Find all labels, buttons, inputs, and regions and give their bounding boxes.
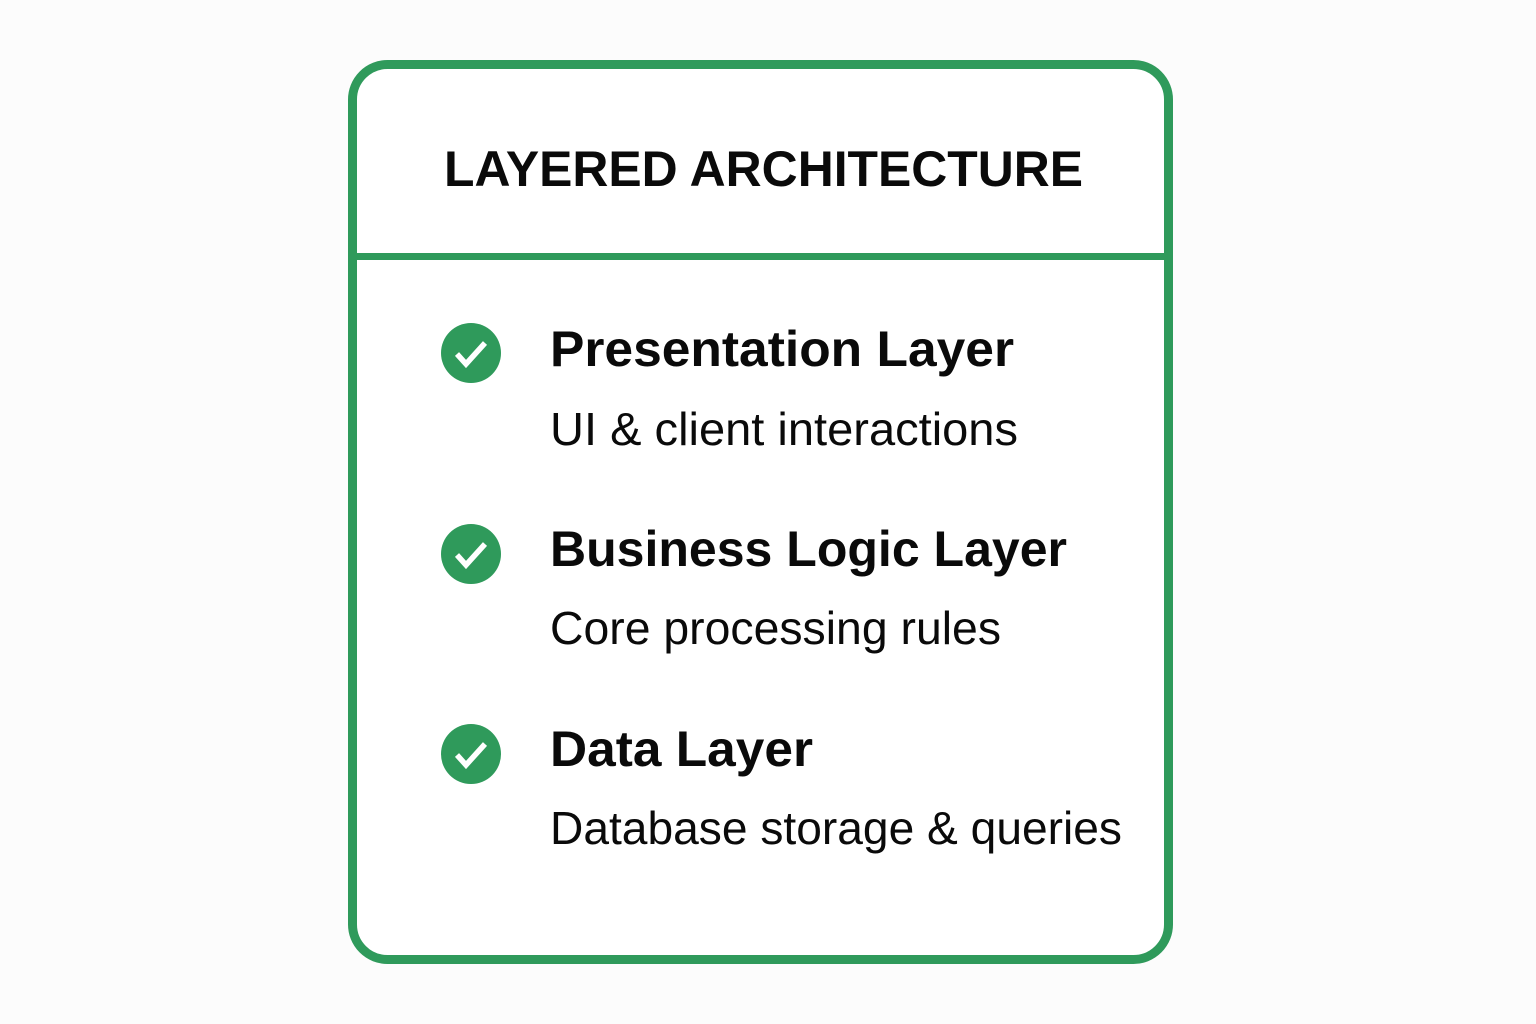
- heading: business logic layer: Business Logic Layer: [550, 521, 1067, 577]
- heading: data layer: Data Layer: [550, 721, 813, 777]
- layer item: presentation: [441, 321, 1018, 455]
- icon: check circle: [441, 524, 501, 584]
- title: LAYERED ARCHITECTURE: [444, 141, 1083, 197]
- heading: presentation layer: Presentation Layer: [550, 321, 1014, 377]
- layer item: business logic: [441, 521, 1067, 654]
- description: presentation layer: UI & client interactions: [550, 403, 1018, 455]
- description: business logic layer: Core processing rules: [550, 602, 1001, 654]
- panel: layered architecture card: [352, 64, 1169, 960]
- icon: check circle: [441, 323, 501, 383]
- icon: check circle: [441, 724, 501, 784]
- description: data layer: Database storage & queries: [550, 802, 1122, 854]
- layer item: data: [441, 721, 1122, 854]
